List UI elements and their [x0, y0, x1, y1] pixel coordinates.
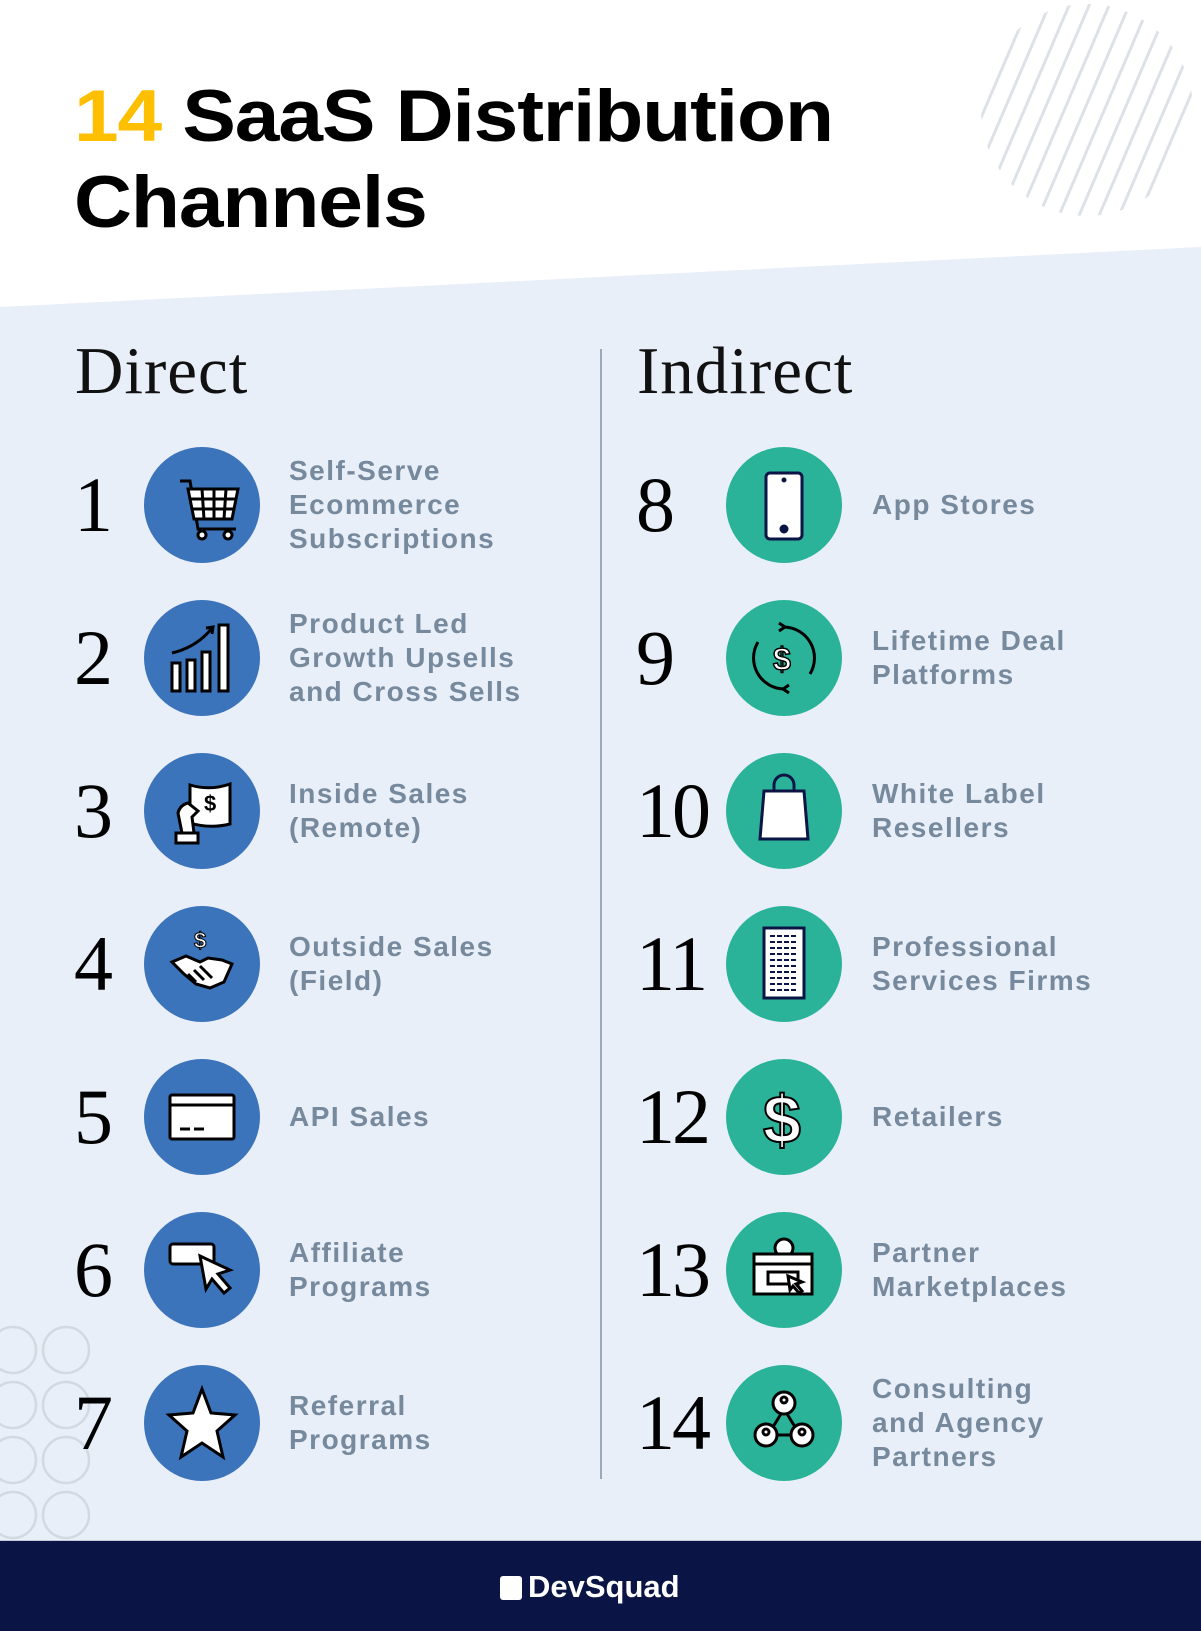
- item 7: [74, 1365, 432, 1481]
- icon: recurring dollar: $: [773, 641, 791, 677]
- item 3: [74, 753, 469, 869]
- item 5: 5: [74, 1073, 110, 1160]
- item 3: 3: [74, 767, 110, 854]
- label: [289, 778, 469, 843]
- icon: dollar: $: [763, 1082, 801, 1158]
- item 11: 11: [636, 920, 705, 1007]
- label: [872, 1237, 1067, 1302]
- item 13: [636, 1212, 1067, 1328]
- footer: [0, 1540, 1201, 1631]
- item 11: [636, 906, 1092, 1022]
- item 14: [636, 1365, 1045, 1481]
- label: Growth Upsells: [289, 642, 515, 673]
- title: Channels: [74, 162, 427, 243]
- label: [872, 931, 1092, 996]
- heading: Direct: Direct: [75, 334, 248, 408]
- divider: [600, 349, 602, 1479]
- item 6: [74, 1212, 432, 1328]
- label: Retailers: [872, 1101, 1004, 1132]
- label: White Label: [872, 778, 1046, 809]
- label: Platforms: [872, 659, 1015, 690]
- item 12: [636, 1059, 1004, 1175]
- label: Inside Sales: [289, 778, 469, 809]
- icon: card: [144, 1059, 260, 1175]
- label: Affiliate: [289, 1237, 405, 1268]
- label: Services Firms: [872, 965, 1092, 996]
- item 4: [74, 906, 494, 1022]
- label: Product Led: [289, 608, 469, 639]
- item 7: 7: [74, 1379, 110, 1466]
- item 6: 6: [74, 1226, 110, 1313]
- icon: network people: [726, 1365, 842, 1481]
- item 2: 2: [74, 614, 110, 701]
- label: Partners: [872, 1441, 998, 1472]
- label: [289, 1390, 432, 1455]
- label: [289, 931, 494, 996]
- icon: marketplace browser: [726, 1212, 842, 1328]
- label: Consulting: [872, 1373, 1033, 1404]
- label: [872, 778, 1046, 843]
- label: and Cross Sells: [289, 676, 522, 707]
- label: [872, 625, 1066, 690]
- label: Referral: [289, 1390, 407, 1421]
- title: [74, 76, 833, 243]
- item 1: [74, 447, 495, 563]
- label: [289, 1237, 432, 1302]
- icon: recurring dollar: [726, 600, 842, 716]
- item 10: 10: [636, 767, 708, 854]
- item 1: 1: [74, 461, 110, 548]
- label: Ecommerce: [289, 489, 461, 520]
- item 8: 8: [636, 461, 672, 548]
- title: 14 SaaS Distribution: [74, 76, 833, 157]
- item 13: 13: [636, 1226, 708, 1313]
- label: Professional: [872, 931, 1058, 962]
- item 10: [636, 753, 1046, 869]
- logo: DevSquad: [528, 1569, 680, 1604]
- decoration: circles grid: [0, 1326, 90, 1540]
- label: [872, 1373, 1045, 1472]
- label: Partner: [872, 1237, 981, 1268]
- icon: phone: [726, 447, 842, 563]
- label: App Stores: [872, 489, 1036, 520]
- item 14: 14: [636, 1379, 708, 1466]
- label: [289, 608, 522, 707]
- icon: server building: [726, 906, 842, 1022]
- item 5: [74, 1059, 430, 1175]
- label: Self-Serve: [289, 455, 441, 486]
- icon: handshake: [144, 906, 260, 1022]
- label: Resellers: [872, 812, 1010, 843]
- icon: star: [144, 1365, 260, 1481]
- label: (Field): [289, 965, 384, 996]
- label: (Remote): [289, 812, 422, 843]
- label: Programs: [289, 1424, 432, 1455]
- item 9: 9: [636, 614, 672, 701]
- icon: cash in hand: $: [204, 791, 216, 816]
- heading: Indirect: Indirect: [637, 334, 853, 408]
- icon: cash in hand: [144, 753, 260, 869]
- icon: dollar: [726, 1059, 842, 1175]
- icon: shopping bag: [726, 753, 842, 869]
- item 4: 4: [74, 920, 110, 1007]
- icon: click pointer: [144, 1212, 260, 1328]
- icon: handshake: $: [194, 928, 206, 953]
- label: [289, 455, 495, 554]
- label: Programs: [289, 1271, 432, 1302]
- item 2: [74, 600, 522, 716]
- label: API Sales: [289, 1101, 430, 1132]
- item 8: [636, 447, 1036, 563]
- icon: growth chart: [144, 600, 260, 716]
- decoration: striped circle: [981, 4, 1192, 216]
- label: Subscriptions: [289, 523, 495, 554]
- label: and Agency: [872, 1407, 1045, 1438]
- label: Outside Sales: [289, 931, 494, 962]
- label: Marketplaces: [872, 1271, 1067, 1302]
- item 12: 12: [636, 1073, 708, 1160]
- item 9: [636, 600, 1066, 716]
- label: Lifetime Deal: [872, 625, 1066, 656]
- icon: cart: [144, 447, 260, 563]
